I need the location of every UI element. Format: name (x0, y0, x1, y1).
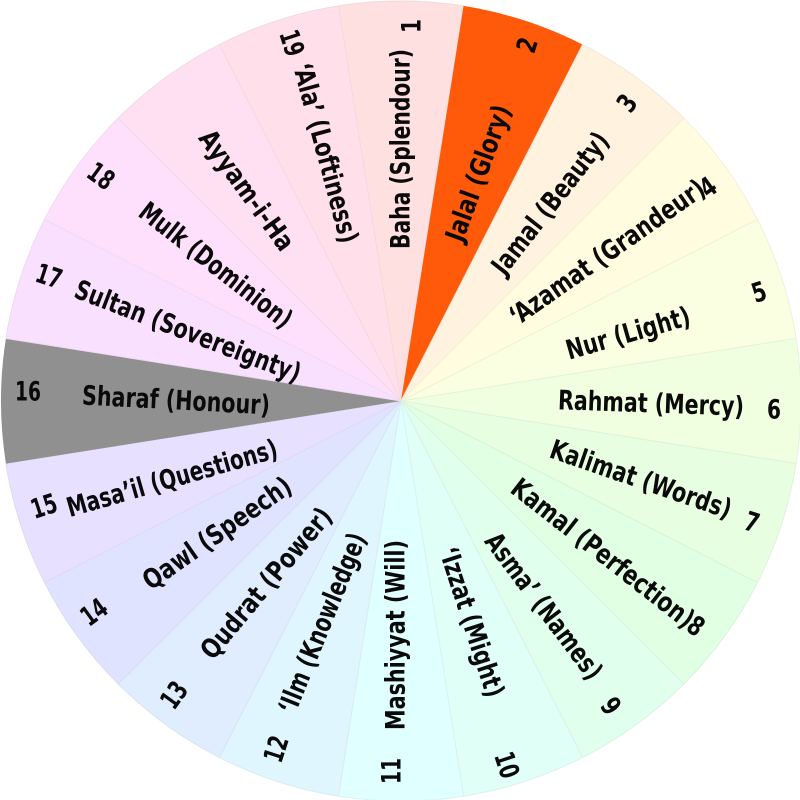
segment 16: Sharaf: 16 (15, 376, 41, 407)
segment 13: Qudrat: Qudrat (Power) (194, 502, 339, 666)
segment: Ayyam-i-Ha: Ayyam-i-Ha (192, 124, 301, 257)
segment 15: Masa'il (6, 401, 401, 583)
segment 14: Qawl: 14 (75, 593, 114, 633)
segment 17: Sultan (6, 219, 401, 401)
segment 1: Baha: 1 (396, 19, 427, 33)
segment 14: Qawl (45, 401, 401, 684)
segment 7: Kalimat: Kalimat (Words) (546, 434, 736, 525)
segment 16: Sharaf: Sharaf (Honour) (81, 381, 271, 421)
segment 9: Asma (401, 401, 684, 757)
segment 8: Kamal: Kamal (Perfection) (505, 473, 700, 635)
segment 2: Jalal (401, 6, 583, 401)
segment 11: Mashiyyat: 11 (376, 758, 407, 784)
segment 17: Sultan: 17 (32, 258, 66, 296)
segment 18: Mulk: Mulk (Dominion) (133, 196, 298, 335)
segment 12: Ilm: ‘Ilm (Knowledge) (273, 529, 373, 718)
segment 3: Jamal: Jamal (Beauty) (485, 126, 616, 282)
segment 18: Mulk: 18 (81, 157, 120, 197)
segment 10: Izzat: 10 (487, 748, 525, 782)
segment 9: Asma: 9 (594, 692, 627, 721)
segment 14: Qawl: Qawl (Speech) (137, 471, 298, 597)
segment 11: Mashiyyat: Mashiyyat (Will) (380, 540, 411, 730)
segment 3: Jamal (401, 45, 684, 401)
segment: Ayyam-i-Ha (118, 45, 401, 401)
segment 4: Azamat (401, 118, 757, 401)
segment 1: Baha (338, 1, 464, 401)
segment 5: Nur (401, 219, 796, 401)
segment 19: Ala (219, 6, 401, 401)
segment 15: Masa'il: Masa’il (Questions) (63, 434, 281, 524)
segment 12: Ilm: 12 (258, 732, 296, 766)
segment 7: Kalimat: 7 (740, 506, 763, 540)
segment 8: Kamal (401, 401, 757, 684)
segment 5: Nur: 5 (748, 276, 771, 310)
segment 4: Azamat: 4 (694, 171, 723, 204)
segment 9: Asma: Asma’ (Names) (478, 527, 609, 686)
segment 18: Mulk (45, 118, 401, 401)
segment 10: Izzat: ‘Izzat (Might) (432, 543, 510, 701)
segment 6: Rahmat (401, 338, 800, 464)
segment 2: Jalal: 2 (511, 34, 545, 57)
segment 7: Kalimat (401, 401, 796, 583)
segment 17: Sultan: Sultan (Sovereignty) (70, 274, 305, 389)
segment 13: Qudrat (118, 401, 401, 757)
segment 3: Jamal: 3 (611, 89, 644, 118)
segment 8: Kamal: 8 (681, 610, 710, 643)
segment 13: Qudrat: 13 (155, 676, 195, 715)
segment 19: Ala: 19 (272, 26, 310, 60)
segment 5: Nur: Nur (Light) (562, 301, 694, 366)
segment 15: Masa'il: 15 (27, 488, 61, 526)
segment 16: Sharaf (1, 338, 401, 464)
segment 12: Ilm (219, 401, 401, 796)
segment 6: Rahmat: Rahmat (Mercy) (557, 385, 744, 423)
segment 4: Azamat: ‘Azamat (Grandeur) (504, 174, 711, 332)
segment 19: Ala: ‘Ala’ (Loftiness) (286, 60, 364, 247)
segment 11: Mashiyyat (338, 401, 464, 800)
segment 2: Jalal: Jalal (Glory) (439, 101, 518, 247)
segment 6: Rahmat: 6 (767, 394, 781, 425)
segment 10: Izzat (401, 401, 583, 796)
